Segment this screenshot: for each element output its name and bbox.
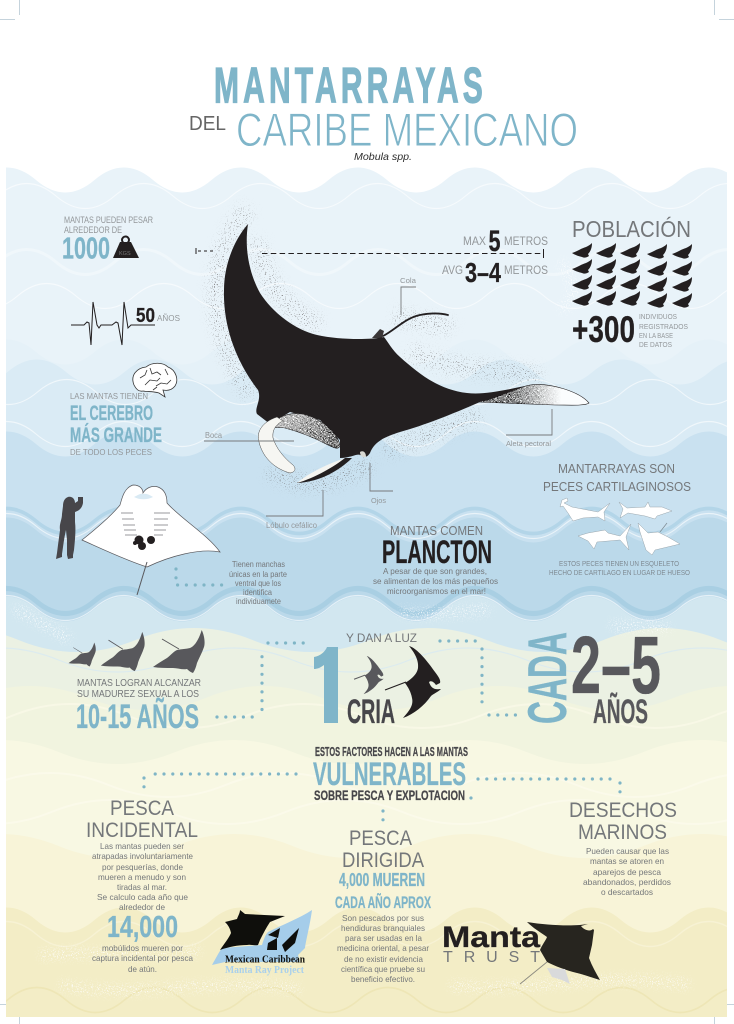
max size [463, 225, 548, 258]
wingspan measurement [196, 225, 548, 288]
weight fact: ALREDEDOR DE [64, 225, 122, 235]
heading: cartilaginous [543, 461, 691, 494]
body text: aparejos de pesca [593, 867, 661, 877]
cartilage caption: ESTOS PECES TIENEN UN ESQUELETO [559, 559, 679, 568]
spots text [229, 560, 288, 606]
population caption: EN LA BASE [639, 331, 673, 340]
plankton text [373, 566, 498, 596]
heading: PESCA [110, 797, 174, 820]
body text: tiradas al mar. [117, 882, 167, 892]
threats heading [144, 745, 620, 822]
label: ojos [370, 463, 393, 505]
heading: MARINOS [578, 821, 667, 844]
body text: Las mantas pueden ser [100, 841, 184, 851]
lower cephalic lobe [297, 458, 352, 483]
anatomy labels [204, 276, 552, 530]
body text [583, 846, 671, 897]
label: lobulo cefalico [266, 490, 323, 530]
plankton heading: PLANCTON [382, 534, 492, 570]
spots text: identifica [243, 588, 273, 597]
weight number: 1000 [62, 230, 110, 266]
body text: abandonados, perdidos [583, 877, 671, 887]
icon: brain [133, 363, 177, 397]
spots text: únicas en la parte [229, 570, 288, 579]
threat: incidental fishing [86, 797, 198, 974]
heading: DESECHOS [569, 799, 677, 822]
heading: DIRIGIDA [342, 849, 424, 872]
label: boca: Boca [205, 431, 223, 440]
logo subtitle: TRUST [443, 949, 540, 966]
body text: de no existir evidencia [344, 954, 423, 964]
population number: +300 [572, 309, 635, 350]
heading: PESCA [349, 827, 412, 850]
black manta [385, 646, 441, 718]
label: cola [400, 276, 417, 315]
spots text: Tienen manchas [232, 560, 285, 569]
heading: Caribe Mexicano: CARIBE MEXICANO [236, 103, 578, 156]
icon grid: mantas [572, 243, 692, 308]
threat: marine debris [569, 799, 677, 897]
body text: para ser usadas en la [345, 933, 422, 943]
logo: Mexican Caribbean Manta Ray Project: Manta Ray Project [225, 965, 305, 976]
brain fact: MÁS GRANDE [70, 424, 162, 447]
birth intro: Y DAN A LUZ [346, 631, 417, 645]
lifespan unit: AÑOS [157, 313, 180, 323]
population caption: REGISTRADOS [639, 322, 688, 331]
dorsal nub [372, 329, 384, 338]
body text: mantas se atoren en [590, 856, 664, 866]
brain fact: DE TODO LOS PECES [70, 447, 152, 457]
dotted connector [176, 569, 229, 585]
threat: targeted fishing [335, 827, 431, 984]
weight caption: MANTAS PUEDEN PESAR [64, 215, 153, 225]
heading [569, 799, 677, 844]
maturity panel [69, 630, 304, 736]
brain fact [70, 363, 177, 457]
heading: cartilaginous: PECES CARTILAGINOSOS [543, 479, 691, 494]
body text: Se calculo cada año que [97, 892, 188, 902]
logo small ray [547, 968, 570, 984]
body text: mueren a menudo y son [98, 872, 186, 882]
weight fact [62, 215, 153, 266]
logo large manta [220, 910, 285, 950]
icon: hammerhead shark [560, 498, 610, 521]
maturity text [77, 678, 201, 700]
maturity text: SU MADUREZ SEXUAL A LOS [77, 689, 199, 700]
icon: shark [619, 502, 672, 519]
dotted connector [217, 643, 304, 717]
plankton panel [373, 524, 498, 596]
small grey manta [354, 656, 384, 694]
icon: diver [56, 497, 83, 559]
pectoral fin tip [478, 384, 589, 405]
upper cephalic lobe [270, 413, 340, 448]
body text: medicina oriental, a pesar [337, 943, 429, 953]
icon: white ray [638, 523, 680, 555]
spots text: ventral que los [235, 579, 281, 588]
body text: por pesquerías, donde [102, 862, 183, 872]
body text: hendiduras branquiales [341, 923, 425, 933]
body text: científica que pruebe su [341, 964, 425, 974]
threats subhead: SOBRE PESCA Y EXPLOTACION [314, 788, 465, 803]
ventral manta [82, 485, 220, 595]
icon: heartbeat line [71, 302, 155, 345]
species name: Mobula spp. [354, 151, 412, 163]
closing text: de atún. [128, 964, 157, 974]
birth panel [314, 620, 661, 731]
dashed line [196, 248, 544, 258]
max size: METROS [504, 234, 548, 248]
logo small mantas [267, 928, 299, 952]
plankton text: se alimentan de los más pequeños [373, 576, 498, 586]
body text [337, 913, 429, 984]
main manta illustration [216, 208, 589, 483]
maturity number: 10-15 AÑOS [76, 698, 199, 736]
average size: METROS [504, 263, 548, 277]
heading [342, 827, 424, 872]
interval number: 2–5 [571, 620, 661, 711]
label: aleta pectoral [506, 409, 552, 448]
heading [86, 797, 198, 842]
cartilage caption [549, 559, 690, 577]
cada word: CADA [516, 632, 578, 724]
icon: growing mantas [69, 630, 205, 673]
lifespan number: 50 [136, 304, 155, 327]
heading: del: DEL [189, 113, 226, 135]
plankton text: microorganismos en el mar! [387, 586, 486, 596]
average size: 3–4 [465, 257, 501, 288]
white cephalic fin [258, 417, 295, 473]
logo: Mexican Caribbean Manta Ray Project [212, 910, 312, 976]
label: lobulo cefalico: Lóbulo cefálico [266, 521, 318, 530]
label: ojos: Ojos [371, 496, 386, 505]
body text [92, 841, 193, 912]
population caption [639, 312, 688, 349]
label: aleta pectoral: Aleta pectoral [506, 439, 551, 448]
plankton intro: MANTAS COMEN [390, 524, 483, 538]
label: boca [204, 431, 294, 441]
spots text: individuamete [236, 597, 281, 606]
max size: 5 [488, 225, 500, 258]
tail [383, 314, 448, 336]
cartilaginous fish panel [543, 461, 691, 577]
logo tail [520, 962, 547, 984]
logo: Manta Trust [442, 921, 600, 984]
max size: MAX [463, 234, 486, 248]
population caption: INDIVIDUOS [639, 312, 677, 321]
deaths figure [335, 870, 431, 912]
vulnerables word: VULNERABLES [313, 756, 466, 792]
average size [442, 257, 548, 288]
lifespan fact [71, 302, 180, 345]
heading: Mantarrayas: MANTARRAYAS [214, 58, 483, 113]
heading: poblacion: POBLACIÓN [572, 216, 691, 242]
number: 14,000 [107, 909, 178, 944]
body text: o descartados [601, 887, 653, 897]
years word: AÑOS [593, 693, 648, 731]
body text: atrapadas involuntariamente [92, 851, 193, 861]
icon: weight: KGS [119, 251, 131, 257]
closing text [92, 943, 193, 974]
title [189, 58, 578, 163]
threats intro: ESTOS FACTORES HACEN A LAS MANTAS [315, 745, 468, 759]
body text: Son pescados por sus [342, 913, 424, 923]
brain fact: EL CEREBRO [70, 402, 153, 425]
heading: cartilaginous: MANTARRAYAS SON [558, 461, 675, 476]
cartilage caption: HECHO DE CARTILAGO EN LUGAR DE HUESO [549, 568, 690, 577]
body text: alrededor de [119, 902, 165, 912]
brain text: LAS MANTAS TIENEN [70, 391, 148, 401]
eye detail [360, 451, 366, 457]
plankton text: A pesar de que son grandes, [383, 566, 487, 576]
cria word: CRIA [347, 693, 395, 731]
heading: INCIDENTAL [86, 819, 198, 842]
dotted connectors [144, 774, 620, 822]
logo wordmark: Manta [442, 921, 540, 954]
ventral spots panel [56, 485, 288, 606]
deaths figure: CADA AÑO APROX [335, 892, 431, 912]
closing text: captura incidental por pesca [92, 953, 193, 963]
logo text: Mexican Caribbean [225, 954, 305, 966]
body [224, 224, 530, 458]
body text: beneficio efectivo. [351, 974, 415, 984]
population panel [572, 216, 692, 350]
logo manta [527, 922, 600, 980]
dotted connector [440, 641, 519, 715]
icon: whale shark [578, 524, 631, 550]
big number one [314, 647, 338, 723]
population caption: DE DATOS [639, 340, 672, 349]
deaths figure: 4,000 MUEREN [339, 870, 425, 890]
body text: Pueden causar que las [586, 846, 669, 856]
average size: AVG [442, 263, 463, 277]
logo swoosh [212, 910, 312, 965]
label: cola: Cola [400, 276, 417, 285]
maturity text: MANTAS LOGRAN ALCANZAR [77, 678, 201, 689]
closing text: mobúlidos mueren por [102, 943, 183, 953]
stipple shading [216, 208, 540, 483]
